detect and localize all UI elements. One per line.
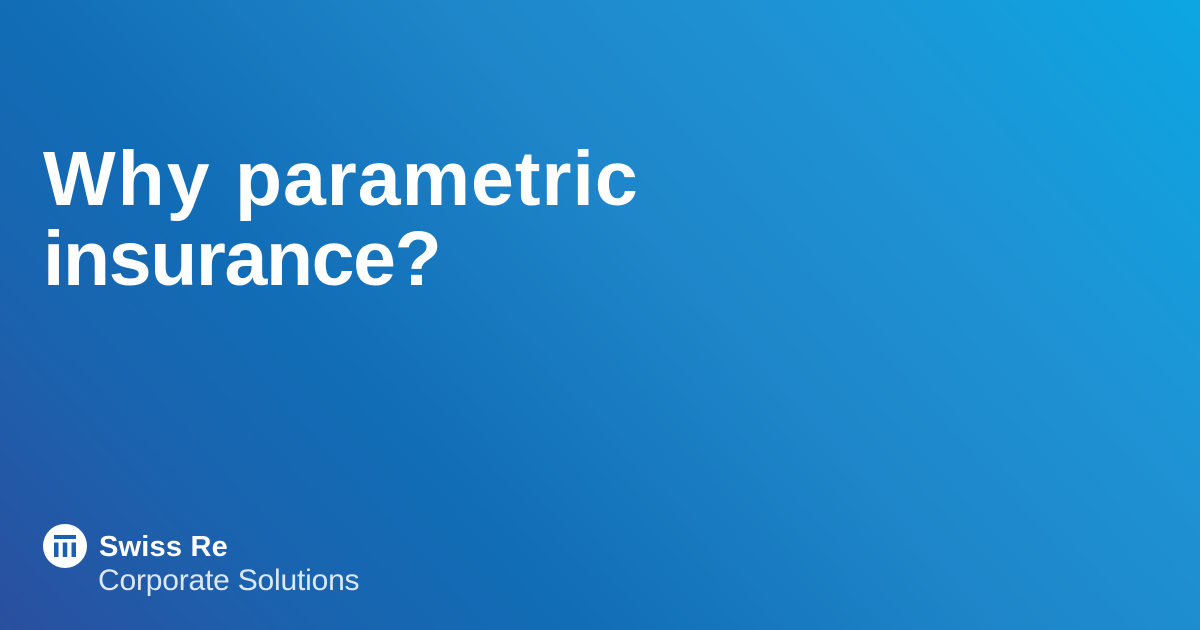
logo: Swiss Re Corporate Solutions [43, 524, 359, 597]
title: insurance? [43, 216, 440, 302]
title [43, 136, 639, 302]
brand name: Swiss Re [99, 531, 228, 563]
title: Why parametric [43, 136, 639, 222]
division name: Corporate Solutions [98, 564, 359, 597]
icon: Swiss Re emblem [43, 524, 87, 568]
